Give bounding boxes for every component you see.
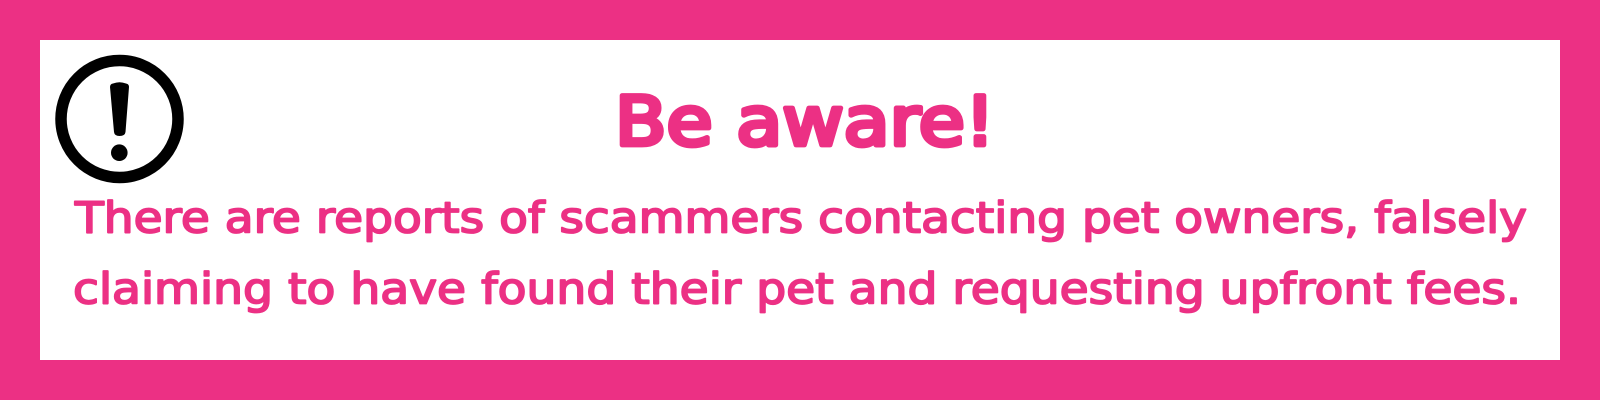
heading: Be aware!: [615, 82, 995, 161]
text block: warning message: claiming to have found their pet and requesting upfront fees.: [73, 264, 1521, 314]
text block: warning message: [73, 193, 1527, 314]
text block: warning message: There are reports of scammers contacting pet owners, falsely: [74, 193, 1527, 243]
panel: white notice area: [40, 40, 1560, 360]
icon: exclamation mark in circle: [61, 60, 178, 178]
